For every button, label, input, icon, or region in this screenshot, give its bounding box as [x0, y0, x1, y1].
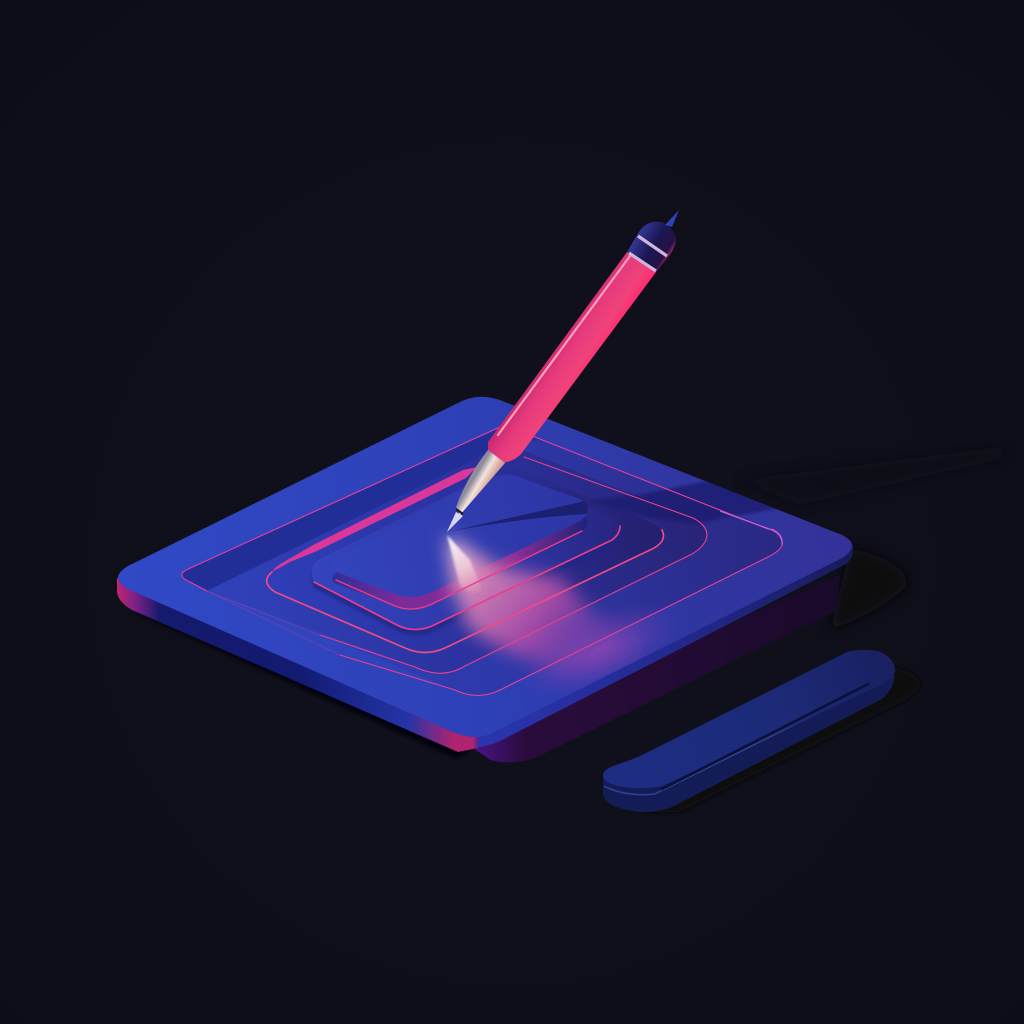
nib collar [456, 509, 463, 514]
tablet underside [465, 575, 840, 762]
fourth line [314, 526, 620, 630]
tablet front edge [117, 578, 490, 752]
pen shadow across tablet [447, 501, 588, 532]
stylus holder [603, 650, 921, 812]
rim line [182, 427, 782, 696]
tablet right lip [478, 545, 853, 747]
drawing tablet [117, 397, 853, 762]
faint surface continuation [207, 591, 320, 635]
holder top face [603, 650, 895, 788]
pink contour lines [182, 427, 782, 696]
stylus ferrule [456, 450, 505, 515]
layer: fourth step [312, 476, 619, 630]
stylus tip antenna [665, 210, 679, 227]
stylus nib [447, 512, 463, 532]
plateau line [336, 531, 582, 609]
plateau side wall [332, 500, 588, 609]
dark band inside the rim [182, 426, 540, 591]
holder base [603, 675, 895, 812]
layer: rim recess [182, 426, 783, 696]
holder groove [662, 684, 868, 789]
cast shadows on the ground [135, 447, 1005, 758]
light glow [434, 526, 666, 692]
holder lower lip [604, 692, 860, 795]
plateau top [332, 474, 588, 597]
step shadow [312, 522, 619, 636]
thick pink contour [272, 467, 477, 572]
large shadow at top right [590, 480, 782, 524]
cap bands [629, 236, 667, 271]
stylus cap [627, 222, 676, 272]
layer: third step [267, 462, 663, 652]
stylus body [488, 252, 656, 463]
layer: second surface [207, 446, 707, 673]
pink stylus [447, 210, 679, 532]
surface line [320, 457, 707, 673]
faint rim continuation [207, 591, 340, 655]
top right rim line tint [720, 511, 782, 545]
stylus highlight [498, 256, 630, 435]
tablet top face [118, 397, 852, 737]
third line [267, 530, 664, 652]
holder shadow [640, 665, 921, 812]
